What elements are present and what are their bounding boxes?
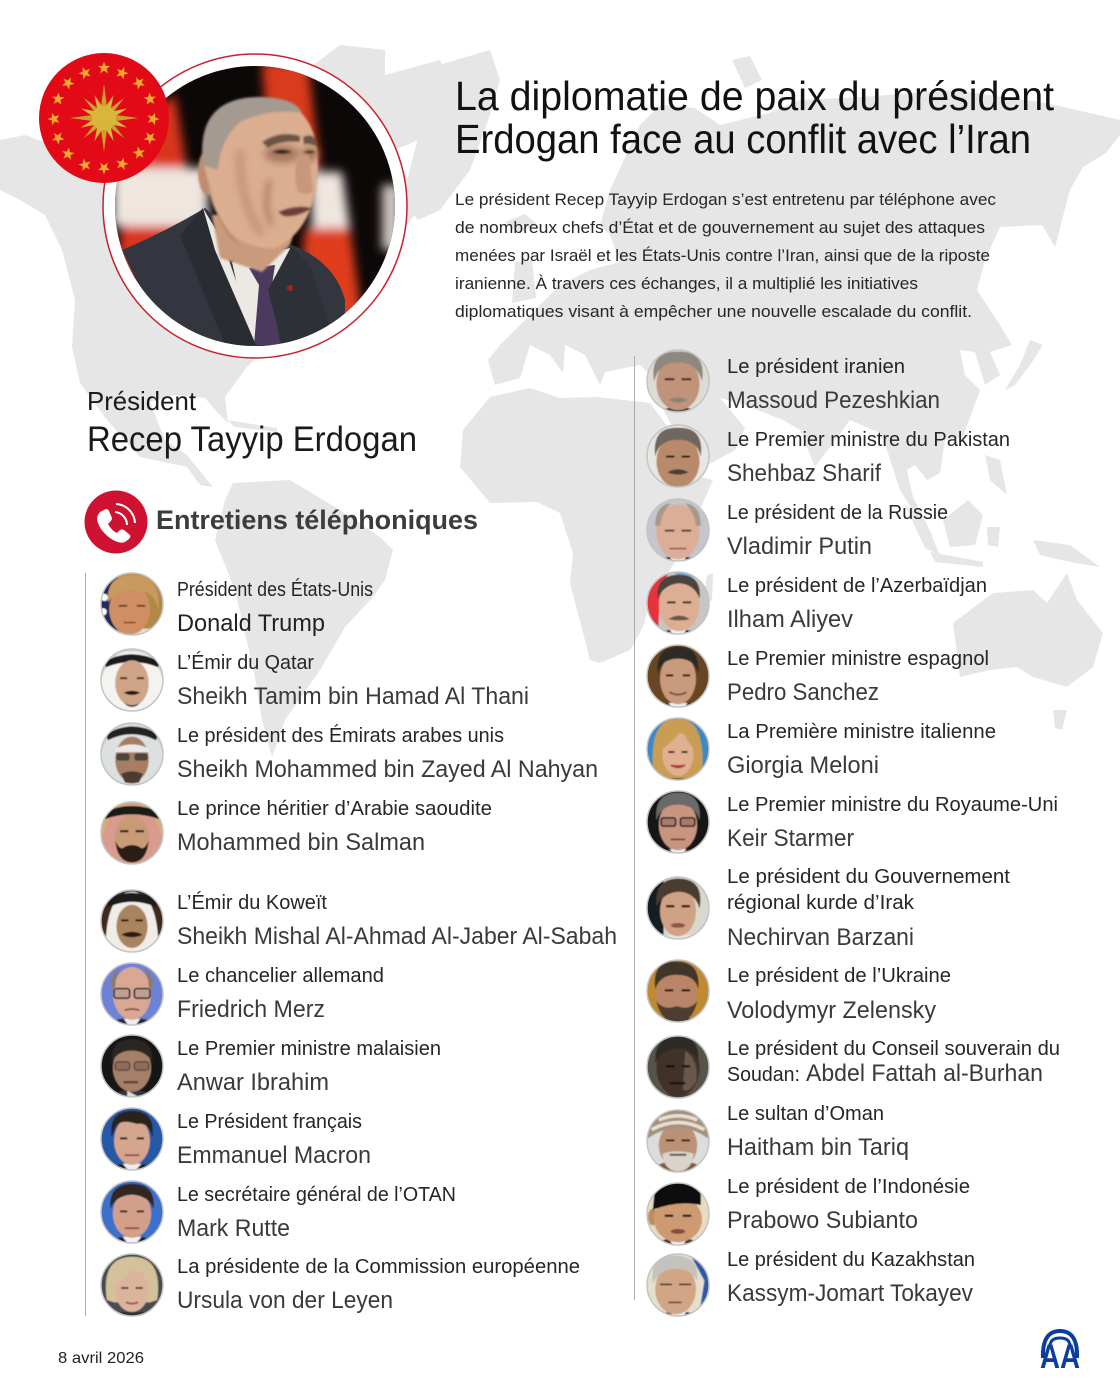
- entry: Vladimir Putin: [646, 498, 948, 562]
- background world map: [0, 45, 1120, 757]
- role: Le prince héritier d’Arabie saoudite: [177, 798, 492, 820]
- avatar: MBZ: [100, 722, 164, 786]
- avatar: Macron: [100, 1107, 164, 1171]
- portrait: President Erdogan: [103, 54, 407, 358]
- name: Massoud Pezeshkian: [727, 387, 940, 414]
- entry: Anwar Ibrahim: [100, 1034, 440, 1098]
- role: L’Émir du Qatar: [177, 651, 314, 674]
- avatar: Burhan: [640, 1032, 716, 1108]
- column divider: right: [634, 356, 635, 1300]
- avatar: Merz: [100, 962, 164, 1026]
- role: Le chancelier allemand: [177, 965, 384, 987]
- entry: Nechirvan Barzani: [646, 868, 1010, 945]
- role line 2: Soudan:: [727, 1064, 800, 1086]
- role: La Première ministre italienne: [727, 721, 996, 743]
- title: Erdogan face au conflit avec l’Iran: [455, 116, 1031, 162]
- name: Mark Rutte: [177, 1215, 290, 1242]
- avatar: Putin: [646, 498, 710, 562]
- intro paragraph: iranienne. À travers ces échanges, il a multiplié les initiatives: [455, 274, 918, 293]
- role: Le Premier ministre du Pakistan: [727, 429, 1010, 451]
- seal of the Turkish presidency: [39, 53, 169, 183]
- avatar: Haitham: [640, 1106, 716, 1182]
- name: Anwar Ibrahim: [177, 1069, 329, 1096]
- title: [455, 73, 1055, 162]
- intro paragraph: Le président Recep Tayyip Erdogan s’est entretenu par téléphone avec: [455, 190, 996, 209]
- role: Le Président français: [177, 1111, 362, 1133]
- entry: Prabowo Subianto: [640, 1176, 970, 1255]
- avatar: Prabowo: [640, 1179, 716, 1255]
- entry: Massoud Pezeshkian: [646, 349, 938, 413]
- role: Président des États-Unis: [177, 578, 373, 601]
- entry: Donald Trump: [100, 572, 372, 636]
- name: Giorgia Meloni: [727, 752, 879, 779]
- intro paragraph: [455, 190, 996, 321]
- avatar: Mishal: [100, 889, 164, 953]
- name: Pedro Sanchez: [727, 679, 879, 706]
- entry: Shehbaz Sharif: [646, 424, 1009, 488]
- avatar: von der Leyen: [100, 1253, 164, 1317]
- name: Keir Starmer: [727, 825, 854, 852]
- title: La diplomatie de paix du président: [455, 73, 1055, 119]
- avatar: Trump: [100, 572, 164, 636]
- role: Le président de l’Indonésie: [727, 1176, 970, 1198]
- date: 8 avril 2026: [58, 1350, 144, 1367]
- name: Abdel Fattah al-Burhan: [806, 1060, 1043, 1087]
- name: Shehbaz Sharif: [727, 460, 881, 487]
- avatar: Sharif: [646, 424, 710, 488]
- intro paragraph: diplomatiques visant à empêcher une nouvelle escalade du conflit.: [455, 302, 972, 321]
- entry: Friedrich Merz: [100, 962, 383, 1026]
- name: Volodymyr Zelensky: [727, 997, 936, 1024]
- name: Haitham bin Tariq: [727, 1134, 909, 1161]
- name: Donald Trump: [177, 610, 325, 637]
- section heading: Entretiens téléphoniques: [156, 505, 478, 535]
- name: Emmanuel Macron: [177, 1142, 371, 1169]
- president name block: Recep Tayyip Erdogan: [87, 420, 417, 459]
- entry: Pedro Sanchez: [646, 644, 988, 708]
- role: Le président iranien: [727, 356, 905, 378]
- role: Le Premier ministre espagnol: [727, 648, 989, 670]
- role: L’Émir du Koweït: [177, 891, 327, 914]
- name: Prabowo Subianto: [727, 1207, 918, 1234]
- name: Ursula von der Leyen: [177, 1287, 393, 1314]
- entry: Haitham bin Tariq: [640, 1103, 909, 1182]
- name: Vladimir Putin: [727, 533, 872, 560]
- role: Le président du Gouvernement: [727, 866, 1010, 888]
- name: Sheikh Mishal Al-Ahmad Al-Jaber Al-Sabah: [177, 923, 617, 950]
- avatar: Rutte: [100, 1180, 164, 1244]
- entry: Mohammed bin Zayed Al Nahyan: [100, 722, 597, 786]
- entry: Tamim bin Hamad Al Thani: [100, 648, 528, 712]
- entry: Emmanuel Macron: [100, 1107, 370, 1171]
- avatar: MBS: [100, 801, 164, 865]
- name: Kassym-Jomart Tokayev: [727, 1280, 973, 1307]
- entry: Mishal Al-Ahmad: [100, 889, 616, 953]
- role: Le secrétaire général de l’OTAN: [177, 1184, 456, 1206]
- avatar: Tokayev: [640, 1250, 716, 1326]
- role: La présidente de la Commission européenne: [177, 1256, 580, 1278]
- role line 2: régional kurde d’Irak: [727, 892, 915, 914]
- name: Ilham Aliyev: [727, 606, 853, 633]
- avatar: Aliyev: [646, 571, 710, 635]
- entry: Giorgia Meloni: [646, 717, 996, 781]
- name: Sheikh Mohammed bin Zayed Al Nahyan: [177, 756, 598, 783]
- entry: Volodymyr Zelensky: [646, 959, 950, 1023]
- role: Le président des Émirats arabes unis: [177, 724, 504, 747]
- role: Le président du Kazakhstan: [727, 1249, 975, 1271]
- avatar: Zelensky: [646, 959, 710, 1023]
- entry: Abdel Fattah al-Burhan: [646, 1035, 1059, 1099]
- avatar: Barzani: [646, 876, 710, 940]
- entry: Mohammed bin Salman: [100, 800, 492, 865]
- avatar: Meloni: [646, 717, 710, 781]
- role: Le président de l’Azerbaïdjan: [727, 575, 987, 597]
- logo: Anadolu Agency: AA: [1040, 1338, 1080, 1376]
- name: Nechirvan Barzani: [727, 924, 914, 951]
- intro paragraph: menées par Israël et les États-Unis contre l’Iran, ainsi que de la riposte: [455, 246, 990, 265]
- avatar: Anwar: [100, 1034, 164, 1098]
- seal sun: [70, 84, 138, 152]
- name: Mohammed bin Salman: [177, 829, 425, 856]
- entry: Kassym-Jomart Tokayev: [640, 1249, 975, 1326]
- entry: Mark Rutte: [100, 1180, 454, 1244]
- entry: Ilham Aliyev: [646, 571, 986, 635]
- role: Le sultan d’Oman: [727, 1103, 884, 1125]
- entry: Keir Starmer: [646, 790, 1057, 854]
- entry: Ursula von der Leyen: [100, 1253, 580, 1317]
- column divider: left: [85, 573, 86, 1316]
- president name block: Président: [87, 386, 197, 416]
- role: Le président de la Russie: [727, 502, 948, 524]
- avatar: Sanchez: [646, 644, 710, 708]
- intro paragraph: de nombreux chefs d’État et de gouvernement au sujet des attaques: [455, 218, 985, 237]
- avatar: Tamim: [100, 648, 164, 712]
- role: Le Premier ministre du Royaume-Uni: [727, 794, 1058, 816]
- avatar: Starmer: [646, 790, 710, 854]
- name: Friedrich Merz: [177, 996, 325, 1023]
- role: Le président de l’Ukraine: [727, 965, 951, 987]
- icon: phone: [84, 490, 148, 554]
- president name block: [87, 386, 417, 459]
- avatar: Pezeshkian: [646, 349, 710, 413]
- role: Le président du Conseil souverain du: [727, 1038, 1060, 1060]
- name: Sheikh Tamim bin Hamad Al Thani: [177, 683, 529, 710]
- role: Le Premier ministre malaisien: [177, 1038, 441, 1060]
- seal stars: [48, 62, 160, 174]
